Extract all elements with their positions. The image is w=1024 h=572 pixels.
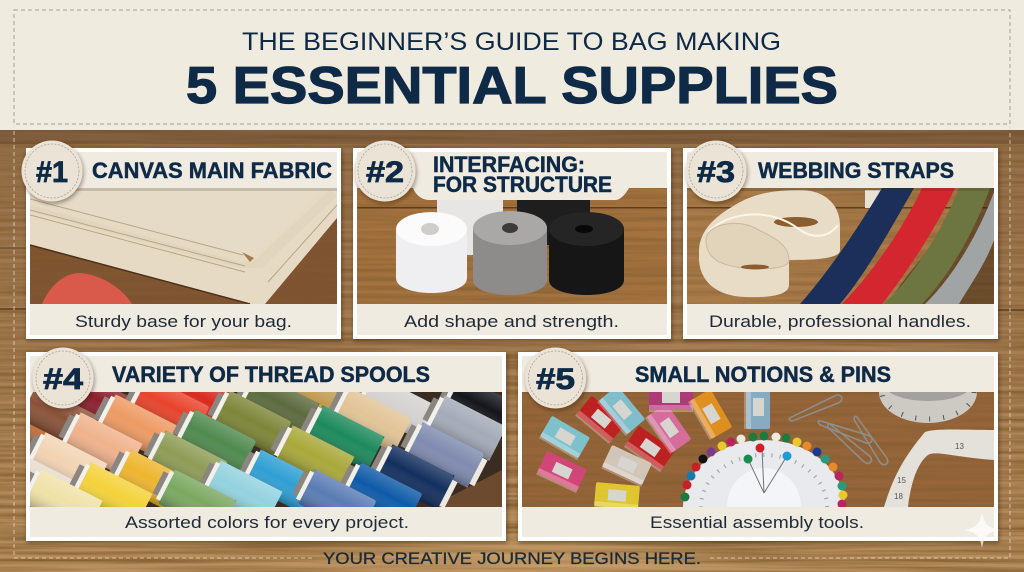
caption: Durable, professional handles. <box>709 312 971 331</box>
caption: Sturdy base for your bag. <box>75 312 292 331</box>
footer tagline: YOUR CREATIVE JOURNEY BEGINS HERE. <box>323 549 701 568</box>
photo: clips, pins and tape: 15 <box>897 476 906 485</box>
heading: VARIETY OF THREAD SPOOLS <box>112 362 430 387</box>
caption: Essential assembly tools. <box>650 513 864 532</box>
heading band <box>30 356 502 392</box>
badge #2: #2 <box>366 156 404 189</box>
heading: FOR STRUCTURE <box>433 172 612 197</box>
badge #5: #5 <box>536 363 575 396</box>
photo: thread spools <box>30 392 502 507</box>
heading: INTERFACING: <box>433 152 585 177</box>
badge #1 <box>22 140 82 202</box>
photo: interfacing rolls <box>357 188 667 304</box>
badge #5 <box>525 348 586 408</box>
card 5: notions and pins <box>516 352 1002 546</box>
photo: webbing straps <box>687 188 994 304</box>
header panel <box>0 0 1024 130</box>
caption: Assorted colors for every project. <box>125 513 409 532</box>
main title: 5 ESSENTIAL SUPPLIES <box>186 57 838 115</box>
photo: clips, pins and tape: 18 <box>894 492 903 501</box>
badge #2 <box>354 140 416 202</box>
card 1: canvas main fabric <box>26 148 341 339</box>
photo: folded canvas <box>30 188 337 304</box>
badge #4: #4 <box>43 363 83 396</box>
band shadow <box>30 188 337 191</box>
subtitle: THE BEGINNER’S GUIDE TO BAG MAKING <box>242 28 781 56</box>
photo: clips, pins and tape: 13 <box>955 442 964 451</box>
sparkle icon <box>964 512 1000 548</box>
heading <box>433 152 612 197</box>
heading tab <box>357 152 667 200</box>
badge #3 <box>686 140 746 202</box>
heading band <box>522 356 994 392</box>
card 2: interfacing <box>353 148 671 339</box>
stitched border on wood <box>14 124 1010 558</box>
caption: Add shape and strength. <box>404 312 619 331</box>
badge #1: #1 <box>36 156 68 189</box>
band shadow <box>687 188 994 191</box>
badge #4 <box>32 348 94 408</box>
heading band <box>30 152 337 188</box>
badge #3: #3 <box>697 156 735 189</box>
wood background <box>0 130 1024 572</box>
photo: clips, pins and tape <box>522 392 994 507</box>
heading: SMALL NOTIONS & PINS <box>635 362 891 387</box>
card 4: thread spools <box>0 352 523 541</box>
card 3: webbing straps <box>683 148 998 339</box>
chalk <box>42 273 132 304</box>
heading band <box>687 152 994 188</box>
heading: CANVAS MAIN FABRIC <box>92 158 332 183</box>
heading: WEBBING STRAPS <box>758 158 954 183</box>
